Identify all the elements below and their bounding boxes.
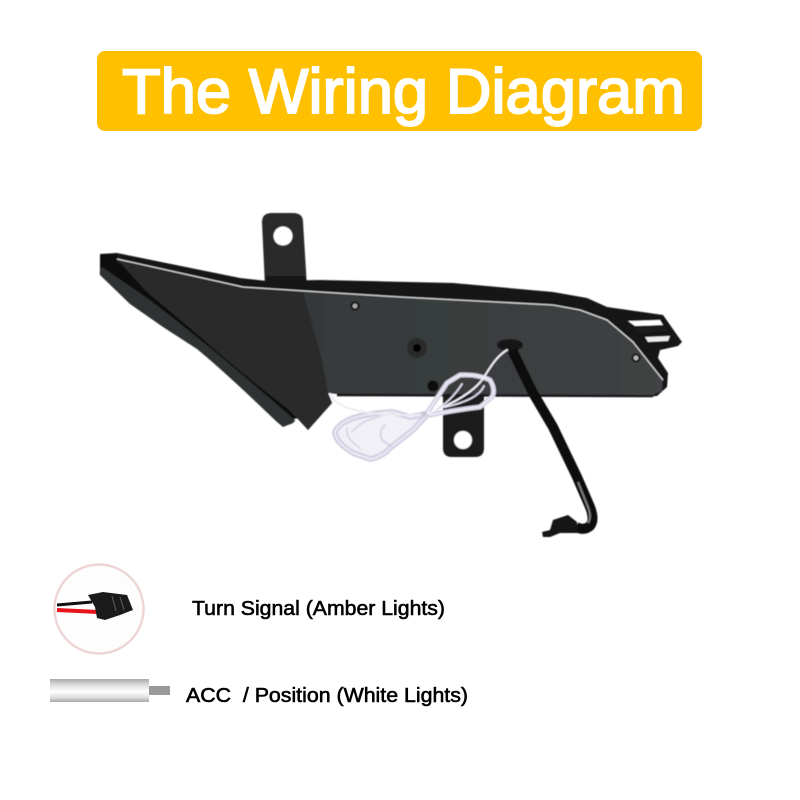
left loop	[335, 412, 427, 459]
lead wire	[427, 350, 507, 414]
screws and holes	[350, 302, 640, 392]
stray wire	[330, 394, 422, 415]
product photo: wiring harness lamp	[100, 213, 682, 537]
grommet	[497, 339, 523, 351]
top mounting bracket	[262, 213, 307, 287]
right clip	[628, 320, 670, 342]
title: The Wiring Diagram	[122, 57, 685, 127]
legend: turn signal connector icon	[54, 564, 144, 654]
title banner	[97, 51, 702, 131]
lamp body	[117, 259, 663, 430]
turn signal black cable	[512, 350, 592, 529]
lamp edge strip	[100, 267, 295, 427]
legend label: turn signal: Turn Signal (Amber Lights)	[192, 597, 445, 620]
outer rim and right end	[117, 253, 682, 397]
cable connector	[542, 515, 577, 537]
legend label: ACC position: ACC / Position (White Lights)	[186, 684, 468, 707]
bottom mounting bracket	[443, 390, 484, 457]
dark seam under lamp edge	[100, 253, 300, 420]
white highlight line	[117, 259, 663, 380]
bottom edge of lamp	[337, 395, 653, 396]
legend: ACC wire icon	[50, 679, 170, 702]
right loop	[427, 375, 494, 415]
white ACC wire bundle	[330, 350, 507, 459]
darker left facet	[117, 259, 332, 430]
